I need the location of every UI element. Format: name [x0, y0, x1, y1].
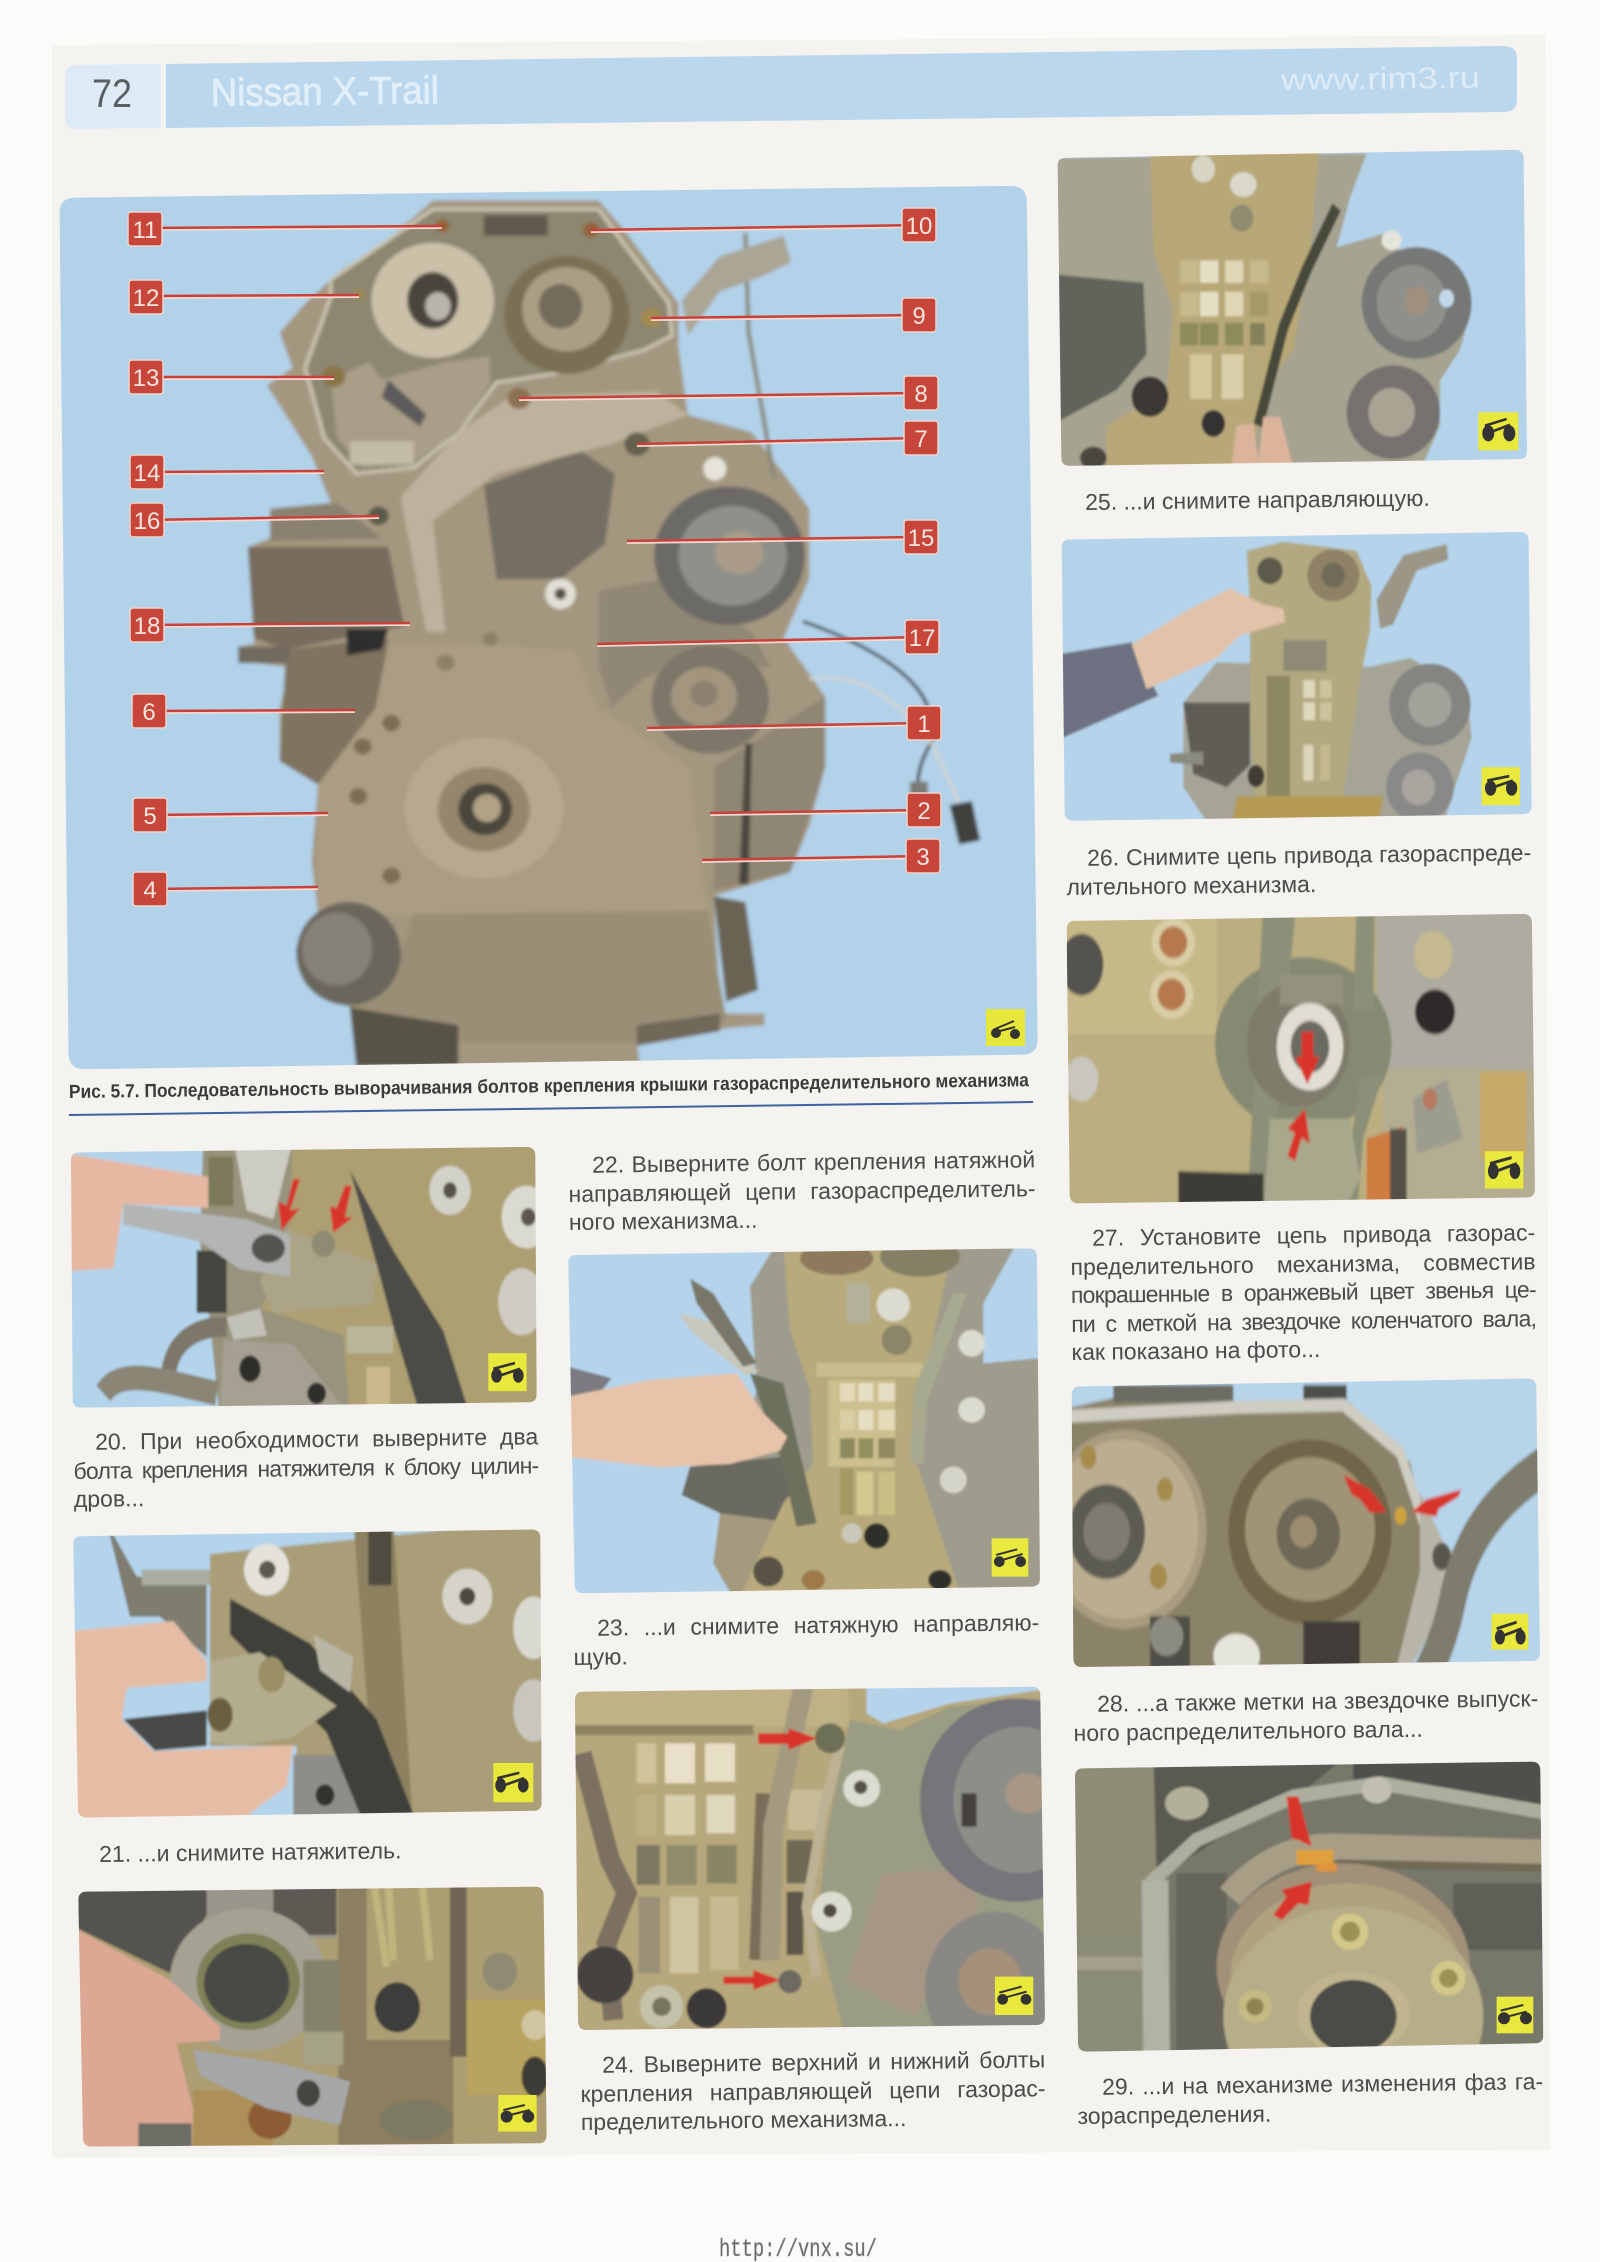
photo 28: exhaust cam sprocket marks [1043, 1363, 1563, 1681]
centre hole [1297, 1972, 1410, 2055]
callout 16 [130, 503, 379, 537]
sleeve [550, 1362, 612, 1455]
callout 15: 15 [908, 525, 934, 552]
arrows [1287, 1797, 1312, 1847]
icon: badge [493, 1763, 533, 1802]
tensioner [210, 1652, 337, 1746]
exhaust sprocket [504, 256, 629, 374]
idler pulley [925, 1912, 1065, 2065]
engine silhouette [238, 201, 825, 1066]
arrows [758, 1728, 817, 1750]
icon: badge [488, 1353, 527, 1391]
callout 10 [591, 208, 936, 242]
step 24 text: пределительного механизма... [581, 2105, 907, 2135]
dark base [1178, 1171, 1263, 1218]
engine [683, 1243, 1057, 1603]
icon: badge [1482, 767, 1520, 805]
page number tab [65, 64, 161, 129]
step 26 text [1066, 839, 1531, 899]
header band [65, 46, 1517, 129]
step 27 text [1070, 1219, 1536, 1365]
pulleys [1389, 664, 1471, 746]
callout 4 [133, 872, 318, 906]
bracket arm [1377, 544, 1448, 629]
callout 12: 12 [133, 285, 159, 312]
step 28 text: 28. ...а также метки на звездочке выпуск- [1097, 1685, 1538, 1717]
page number: 72 [92, 72, 132, 116]
dark top [60, 1880, 210, 1973]
chain and guide [582, 1753, 627, 2020]
top rib [557, 1680, 848, 1727]
callout 11: 11 [133, 217, 157, 244]
callout 18 [130, 608, 410, 642]
icon: badge [995, 1977, 1033, 2015]
step 27 text: как показано на фото... [1071, 1336, 1320, 1365]
sprocket ring [1217, 1863, 1470, 2070]
chain [1230, 1847, 1560, 1897]
rods [373, 1880, 430, 1967]
oil pan [350, 911, 726, 1043]
photo: tensioner held in hand (step 21) [60, 1514, 560, 1835]
callout 13: 13 [133, 365, 159, 392]
callout 6 [132, 694, 355, 728]
callout 9: 9 [912, 303, 926, 330]
step 20 text: болта крепления натяжителя к блоку цилин- [73, 1452, 539, 1483]
callout 10: 10 [906, 213, 932, 240]
website: www.rim3.ru [1279, 62, 1480, 97]
bosses [847, 1283, 870, 1323]
photo: wrench and chain at bottom left [60, 1873, 567, 2160]
callout 1: 1 [917, 711, 931, 738]
tensioner [260, 1228, 377, 1313]
callout 14 [130, 455, 324, 489]
callout 15 [627, 520, 938, 554]
callout 5: 5 [143, 803, 157, 830]
photo: wrench on tensioner (step 20) [60, 1130, 553, 1425]
step 20 text: дров... [74, 1485, 144, 1512]
callout 7: 7 [914, 426, 928, 453]
step 28 text [1073, 1685, 1538, 1746]
plug holes [1152, 918, 1195, 966]
step 28 text: ного распределительного вала... [1073, 1715, 1423, 1745]
callout 5 [133, 798, 328, 832]
lower grey casting [293, 1755, 393, 1831]
step 22 text: направляющей цепи газораспределитель- [568, 1175, 1036, 1206]
dark stain [484, 450, 615, 579]
grey casting [817, 1697, 1063, 2043]
top gears [800, 1242, 873, 1275]
gold casting [737, 1243, 963, 1603]
icon: badge [1497, 1997, 1533, 2033]
photo 27: crank sprocket marks [1050, 900, 1550, 1218]
panel: main engine photo with numbered bolts [60, 186, 1038, 1070]
hand [60, 1152, 208, 1272]
idler pulley [1347, 365, 1440, 459]
fingers [1230, 417, 1297, 479]
gasket [1150, 1783, 1560, 1883]
callout 8 [519, 376, 938, 410]
copper hole [193, 2090, 273, 2160]
step 22 text [568, 1146, 1036, 1235]
callout 3 [702, 839, 940, 873]
sprocket [1247, 982, 1350, 1106]
lower idler pulley [652, 645, 769, 753]
grid [828, 1380, 895, 1467]
photo 25: guide removal [1058, 150, 1527, 466]
bolt [483, 1952, 517, 1991]
bosses [429, 1166, 471, 1215]
hand [60, 1621, 293, 1831]
photo icon: yellow badge [986, 1009, 1025, 1046]
arrows [278, 1179, 300, 1230]
callout 3: 3 [916, 844, 930, 871]
hose [168, 1326, 227, 1384]
bracket arm [682, 236, 791, 336]
step 24 text: 24. Выверните верхний и нижний болты [602, 2046, 1045, 2078]
step 27 text: пи с меткой на звездочке коленчатого вала, [1071, 1305, 1536, 1336]
icon: badge [992, 1538, 1028, 1577]
callout 14: 14 [134, 460, 160, 487]
icon: badge [1492, 1614, 1528, 1650]
step 23 text: щую. [573, 1643, 628, 1669]
dark block [197, 1251, 227, 1313]
timing cover opening [305, 209, 672, 474]
header bar [166, 46, 1517, 128]
step 20 text [73, 1423, 539, 1512]
callout 6: 6 [142, 699, 156, 726]
callout 18: 18 [134, 613, 160, 640]
step 24 text: крепления направляющей цепи газорас- [580, 2075, 1046, 2106]
guide being removed [1258, 207, 1337, 426]
sleeve [1050, 642, 1158, 744]
photo 23: hand removing tension guide [550, 1233, 1057, 1603]
arrows [1295, 1032, 1320, 1084]
photo 26: chain removal with hand [1033, 511, 1567, 850]
lower parts [1150, 1616, 1190, 1681]
bracket [1393, 1492, 1467, 1681]
sprocket [1228, 1440, 1392, 1624]
lifted cover plate [1247, 542, 1372, 836]
gasket edge [1050, 1405, 1425, 1527]
grid [637, 1743, 657, 1783]
step 27 text: покрашенные в оранжевый цвет звенья це- [1071, 1276, 1536, 1308]
phaser [1043, 1430, 1207, 1629]
guide [350, 1170, 472, 1420]
bosses [244, 1544, 289, 1596]
hand [550, 1373, 787, 1467]
callout 7 [637, 421, 938, 455]
holes [864, 1523, 889, 1549]
light casting ridge [401, 391, 688, 632]
wrench [193, 2050, 350, 2125]
running title: Nissan X-Trail [211, 69, 439, 115]
step 21 text: 21. ...и снимите натяжитель. [99, 1837, 402, 1867]
step 27 text: пределительного механизма, совместив [1070, 1248, 1536, 1279]
callout 2: 2 [917, 798, 931, 825]
tension guide [678, 1313, 758, 1375]
step 24 text [580, 2046, 1046, 2135]
icon: badge [1478, 412, 1518, 450]
hand [1132, 589, 1285, 689]
step 23 text [573, 1609, 1039, 1670]
dipstick [745, 233, 774, 479]
right of guide cells [788, 1790, 825, 1830]
pulley [920, 1698, 1113, 1902]
step 22 text: ного механизма... [569, 1207, 758, 1235]
callout 17: 17 [909, 625, 935, 652]
step 22 text: 22. Выверните болт крепления натяжной [592, 1146, 1035, 1178]
engine photo [60, 186, 1038, 1070]
step 27 text: 27. Установите цепь привода газорас- [1092, 1219, 1535, 1251]
pulley [1362, 247, 1472, 359]
oil filter [296, 902, 401, 1005]
crank seal [404, 738, 564, 879]
right guide [910, 1293, 967, 1463]
callout 16: 16 [134, 508, 160, 535]
wrench [123, 1204, 290, 1276]
hand [60, 1920, 220, 2160]
step 29 text [1077, 2068, 1543, 2128]
step 20 text: 20. При необходимости выверните два [95, 1423, 538, 1455]
bolts [1332, 1913, 1368, 1950]
callout 13 [129, 360, 334, 394]
sky [867, 1673, 1063, 1723]
upper pulley [654, 486, 805, 625]
arrows [1343, 1474, 1387, 1513]
callout 8: 8 [914, 381, 928, 408]
callout 4: 4 [143, 877, 157, 904]
step 26 text: 26. Снимите цепь привода газораспреде- [1087, 839, 1531, 871]
wires [803, 621, 934, 788]
seal ring [170, 1908, 327, 2052]
curved arm [1423, 1462, 1550, 1681]
icon: badge [1485, 1151, 1523, 1188]
callout 9 [651, 298, 936, 332]
hole [375, 1982, 420, 2032]
step 25 text: 25. ...и снимите направляющую. [1085, 485, 1430, 515]
mark [1395, 1507, 1407, 1525]
callout 12 [129, 280, 359, 314]
icon: badge [498, 2095, 537, 2132]
callout 17 [597, 620, 939, 654]
orange guide [1367, 1126, 1407, 1218]
figure caption: Рис. 5.7. Последовательность выворачивания болтов крепления крышки газораспределительного механизма [69, 1070, 1029, 1103]
chain band [338, 1880, 367, 2160]
callout 11 [128, 212, 442, 246]
silver bracket [1413, 1079, 1463, 1154]
bolts [435, 219, 449, 232]
lower casting [220, 1340, 353, 1420]
callout 1 [647, 706, 941, 740]
step 29 text: зораспределения. [1077, 2100, 1271, 2128]
bolts and holes [815, 1723, 845, 1753]
guide [230, 1599, 420, 1831]
photo 24: guide bolts with arrows [557, 1670, 1113, 2065]
orange links [1297, 1850, 1333, 1865]
photo 29: phaser mark [1060, 1750, 1560, 2127]
phaser plate [1223, 1907, 1483, 2127]
caption rule [69, 1102, 1033, 1115]
step 29 text: 29. ...и на механизме изменения фаз га- [1102, 2068, 1543, 2100]
camshaft phaser [372, 243, 494, 358]
callout 2 [710, 793, 941, 827]
step 23 text: 23. ...и снимите натяжную направляю- [597, 1609, 1039, 1641]
step 26 text: лительного механизма. [1066, 870, 1316, 899]
chain loop [1215, 957, 1392, 1131]
lower right [467, 2000, 567, 2095]
